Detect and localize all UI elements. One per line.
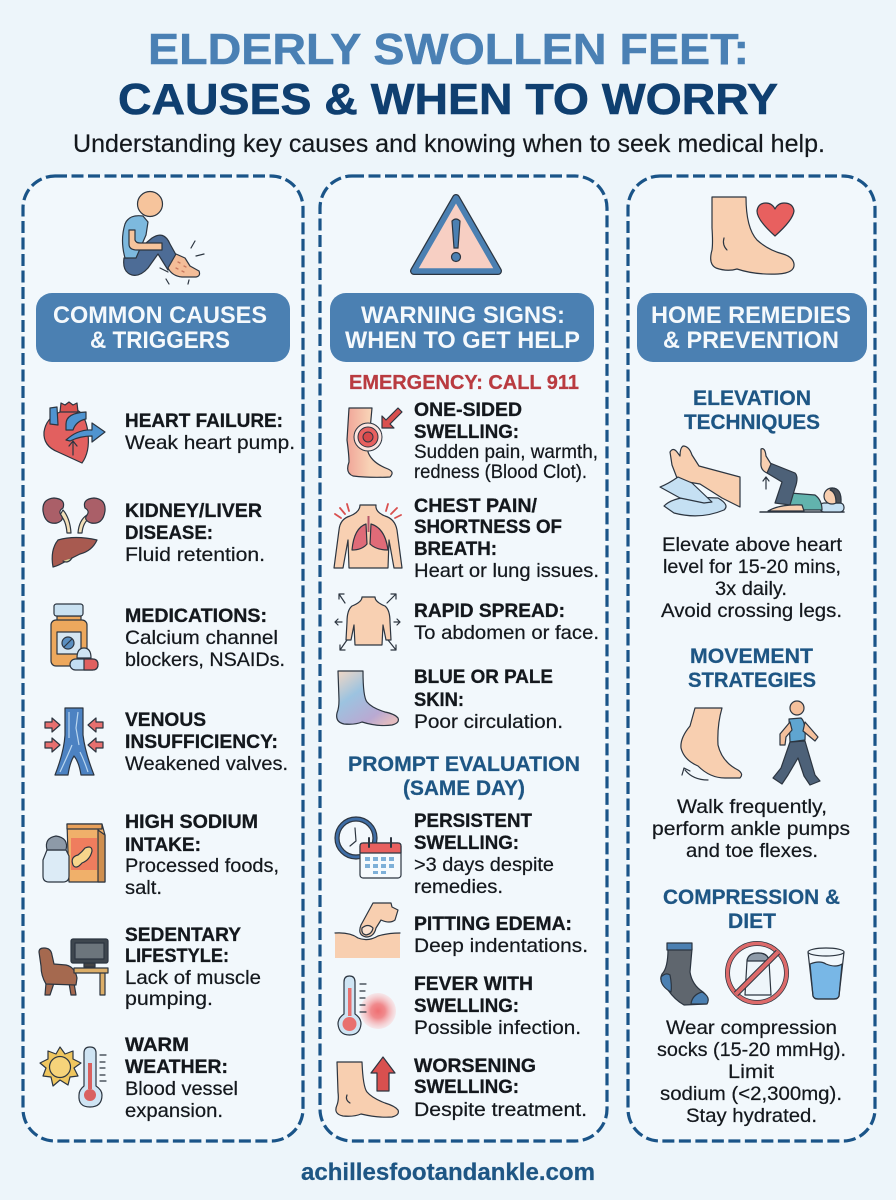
text: elevation advice: Elevate above heart [662,534,843,556]
text [414,973,581,1039]
text: SWELLING: [414,421,519,443]
text: BREATH: [414,538,497,560]
text [125,410,295,454]
text: expansion. [125,1100,223,1122]
text: pumping. [125,988,213,1010]
text: compression and diet advice: socks (15-20 mmHg). [657,1039,846,1061]
item: persistent swelling [335,810,554,898]
text: movement advice: Walk frequently, [677,796,827,818]
text: compression and diet advice: Stay hydrated. [686,1105,817,1127]
footer: website: achillesfootandankle.com [301,1159,595,1186]
text: WARM [125,1034,189,1056]
header: warning signs: WARNING SIGNS: [361,302,565,329]
header: common causes: COMMON CAUSES [53,302,267,329]
text: INSUFFICIENCY: [125,731,278,753]
text: movement advice [652,796,850,862]
text: HIGH SODIUM [125,811,258,833]
text: WEATHER: [125,1056,228,1078]
header: warning signs: WHEN TO GET HELP [345,327,580,354]
text [125,811,279,899]
item: rapid spread [335,594,599,650]
heading: elevation techniques: TECHNIQUES [684,411,820,434]
text: SWELLING: [414,995,519,1017]
text: Despite treatment. [414,1099,587,1121]
heading: compression and diet: COMPRESSION & [663,886,840,909]
header: home remedies: HOME REMEDIES [651,302,851,329]
text: HEART FAILURE: [125,410,283,432]
icon: glass of water [808,948,844,999]
header: common causes [36,293,290,362]
icon: pill bottle [51,604,98,670]
icon: chest with lungs [334,504,402,568]
icon: leg with blood clot [347,408,402,477]
text: compression and diet advice [657,1017,846,1127]
text: To abdomen or face. [414,622,599,644]
text: SWELLING: [414,1076,519,1098]
heading: prompt evaluation: (SAME DAY) [403,777,525,800]
item: sedentary lifestyle [39,924,261,1010]
icon: clock and calendar [335,817,401,878]
icon: person lying with raised legs [760,449,844,512]
header: common causes: & TRIGGERS [90,327,230,354]
text: FEVER WITH [414,973,533,995]
text: Processed foods, [125,855,279,877]
heading: compression and diet [663,886,840,933]
title [118,25,778,124]
text: Poor circulation. [414,711,563,733]
icon: discoloured foot [337,671,398,726]
item: blue or pale skin [337,666,563,733]
text [125,1034,238,1122]
header: home remedies [637,293,867,362]
icon: armchair and TV [39,939,108,995]
heading: compression and diet: DIET [728,910,776,933]
text: salt. [125,877,162,899]
text: CHEST PAIN/ [414,495,538,517]
text [414,399,598,483]
heading: elevation techniques [684,387,820,434]
text: Calcium channel [125,627,278,649]
heading: movement strategies: MOVEMENT [690,645,813,668]
text: SEDENTARY [125,924,241,946]
title: ELDERLY SWOLLEN FEET: [148,25,749,74]
text: Possible infection. [414,1017,581,1039]
icon: walking person [773,701,820,785]
text: Weak heart pump. [125,432,295,454]
icon: salt and chips [43,824,105,882]
text [125,500,265,566]
item: one-sided swelling [347,399,598,483]
text: ONE-SIDED [414,399,522,421]
heading: emergency: EMERGENCY: CALL 911 [349,372,579,394]
heading: prompt evaluation: PROMPT EVALUATION [348,753,580,776]
text: Weakened valves. [125,753,288,775]
text [414,1055,587,1121]
item: chest pain [334,495,599,582]
text: redness (Blood Clot). [414,461,587,483]
text: compression and diet advice: Wear compression [666,1017,837,1039]
text: PERSISTENT [414,810,532,832]
text: SWELLING: [414,832,519,854]
text: elevation advice: 3x daily. [715,578,787,600]
icon: feet on pillows [660,446,740,516]
text: elevation advice: level for 15-20 mins, [663,556,841,578]
subtitle: Understanding key causes and knowing when to seek medical help. [73,130,825,158]
panel: warning signs [320,176,607,1141]
text [414,913,588,957]
text: SKIN: [414,689,464,711]
heading: movement strategies [688,645,816,692]
icon: no salt [728,944,786,1002]
text: INTAKE: [125,834,201,856]
icon: foot with up arrow [336,1057,398,1117]
text: LIFESTYLE: [125,945,229,967]
text: blockers, NSAIDs. [125,649,285,671]
text [414,810,554,898]
heading: movement strategies: STRATEGIES [688,669,816,692]
icon: thermometer with heat glow [338,976,396,1035]
text [414,495,599,582]
item: venous insufficiency [45,708,288,775]
icon: person with swollen foot [122,192,204,284]
text: movement advice: perform ankle pumps [652,818,850,840]
item: high sodium intake [43,811,279,899]
text: compression and diet advice: sodium (<2,300mg). [660,1083,842,1105]
item: fever with swelling [338,973,581,1039]
text: remedies. [414,876,503,898]
text: BLUE OR PALE [414,666,553,688]
text: VENOUS [125,709,206,731]
header: warning signs [330,293,594,362]
icon: warning triangle [414,198,498,271]
icon: sun and thermometer [40,1047,106,1107]
text: MEDICATIONS: [125,605,267,627]
text: KIDNEY/LIVER [125,500,262,522]
item: warm weather [40,1034,238,1122]
text: PITTING EDEMA: [414,913,572,935]
icon: vein with arrows [45,708,103,775]
icon: torso with arrows [335,594,400,650]
item: kidney/liver disease [43,498,265,567]
text: DISEASE: [125,522,213,544]
icon: ankle pump foot [681,708,742,780]
item: medications [51,604,285,671]
icon: kidneys and liver [43,498,105,567]
text: movement advice: and toe flexes. [686,840,818,862]
text [125,924,261,1010]
header: home remedies: & PREVENTION [663,327,839,354]
text: RAPID SPREAD: [414,600,565,622]
text: Fluid retention. [125,544,265,566]
text: SHORTNESS OF [414,516,562,538]
text: compression and diet advice: Limit [728,1061,775,1083]
icon: foot and heart [711,197,794,274]
text [414,600,599,644]
text: Deep indentations. [414,935,588,957]
text: Sudden pain, warmth, [414,441,598,463]
text: elevation advice [661,534,843,622]
title: CAUSES & WHEN TO WORRY [118,75,778,124]
text: elevation advice: Avoid crossing legs. [661,600,842,622]
heading: prompt evaluation [348,753,580,800]
panel: causes [23,176,303,1141]
item: worsening swelling [336,1055,587,1121]
text: >3 days despite [414,854,554,876]
text: WORSENING [414,1055,536,1077]
icon: heart [44,402,105,463]
heading: elevation techniques: ELEVATION [693,387,811,410]
text: Blood vessel [125,1078,238,1100]
item: pitting edema [335,903,588,958]
text [125,605,285,671]
text: Heart or lung issues. [414,560,599,582]
icon: finger pressing skin [335,903,400,958]
text: Lack of muscle [125,967,261,989]
text [414,666,563,733]
panel: home remedies [628,176,875,1141]
icon: compression sock [661,943,708,1005]
text [125,709,288,775]
item: heart failure [44,402,295,463]
